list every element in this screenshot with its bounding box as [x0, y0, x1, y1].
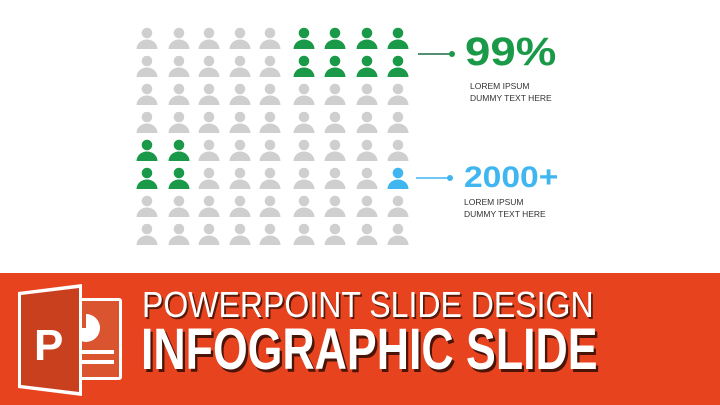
- icon: powerpoint logo: P: [34, 321, 63, 370]
- banner: [0, 273, 720, 405]
- icon: powerpoint logo: [18, 284, 122, 396]
- heading line 2: INFOGRAPHIC SLIDE: [141, 317, 598, 382]
- callout: 99%: 99%: [465, 30, 556, 74]
- callout: 2000+: LOREM IPSUM: [464, 197, 524, 207]
- callout: 2000+: DUMMY TEXT HERE: [464, 209, 546, 219]
- callout: 2000+: 2000+: [464, 161, 558, 194]
- people grid: [136, 28, 408, 245]
- heading line 1: POWERPOINT SLIDE DESIGN: [142, 284, 594, 325]
- callout: 2000+: [416, 161, 558, 219]
- callout: 99%: DUMMY TEXT HERE: [470, 93, 552, 103]
- callout: 99%: [418, 30, 556, 103]
- callout: 99%: LOREM IPSUM: [470, 81, 530, 91]
